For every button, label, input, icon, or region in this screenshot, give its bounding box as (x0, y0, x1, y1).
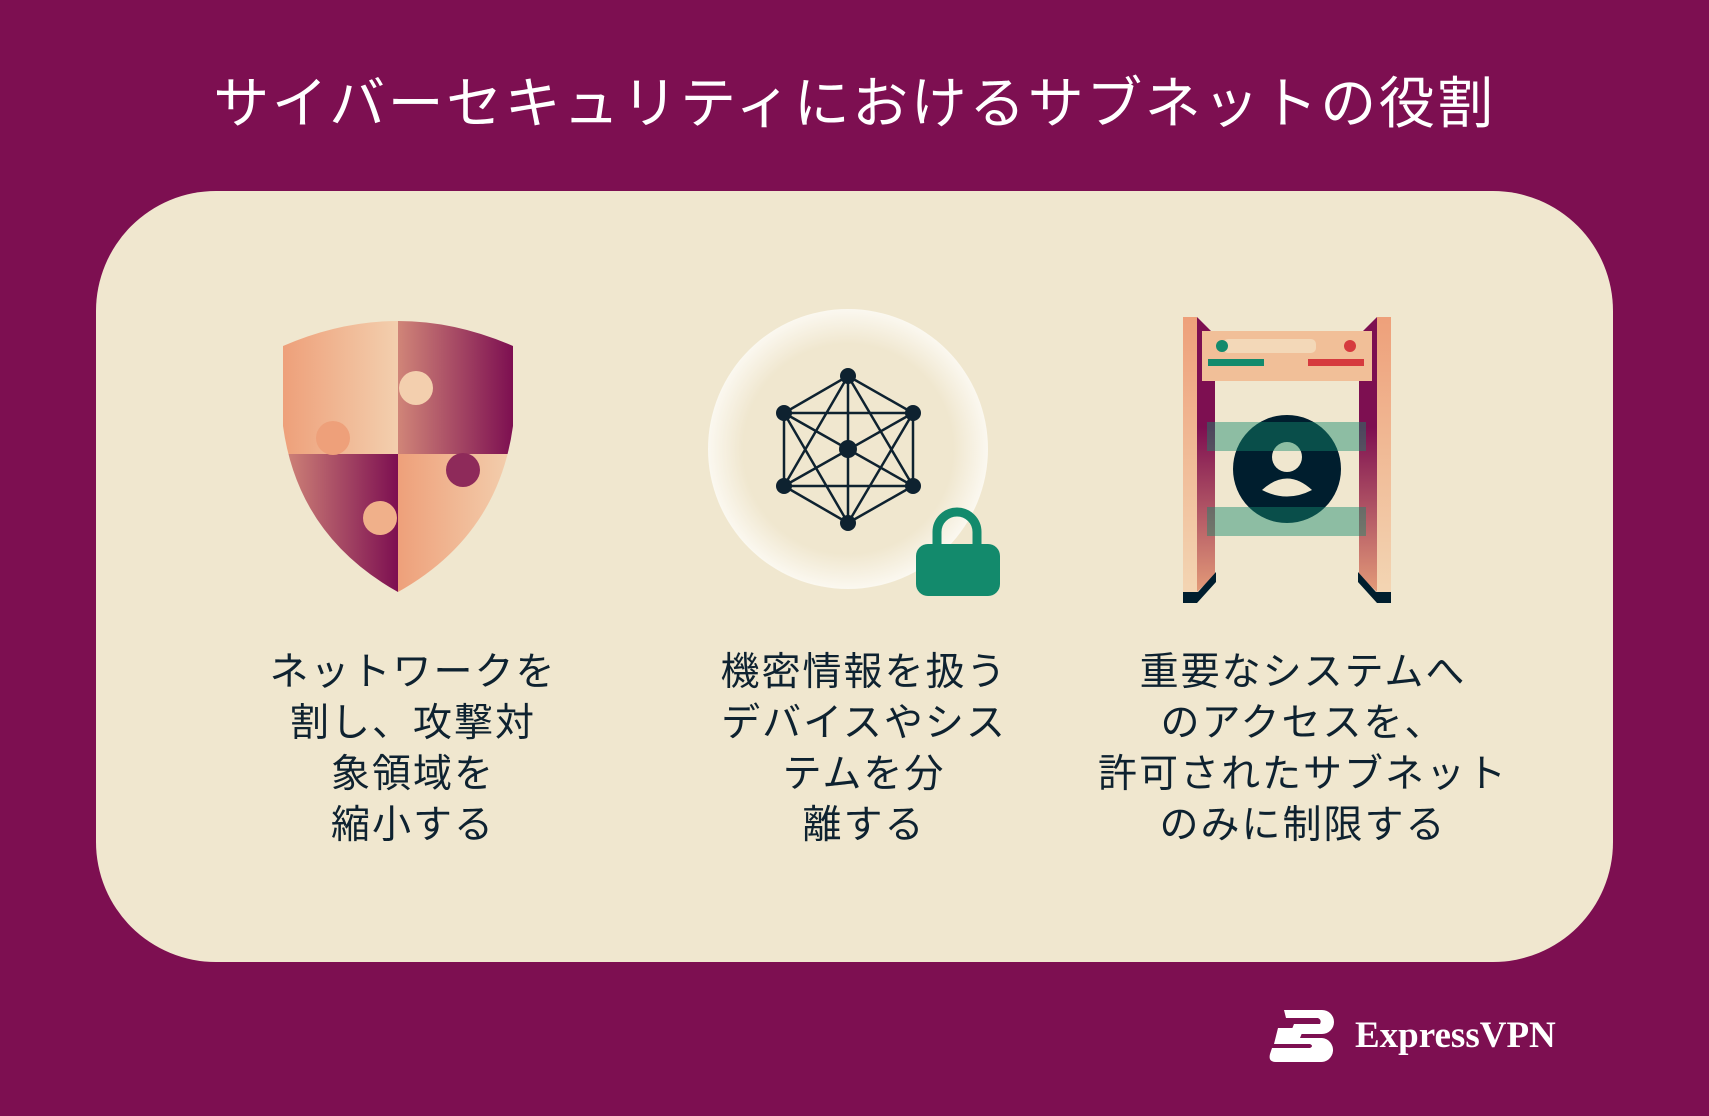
text: column 2 (720, 651, 1008, 847)
icon: security gate scanner (1183, 317, 1391, 603)
icon: puzzle shield (283, 321, 513, 592)
panel: main card (96, 191, 1613, 962)
text: column 1 (269, 651, 556, 847)
logo: ExpressVPN (1270, 1010, 1556, 1062)
text: column 3: 許可されたサブネット (1098, 753, 1508, 796)
text: column 3: のみに制限する (1159, 804, 1446, 847)
text: column 1: 縮小する (331, 804, 495, 847)
logo text: ExpressVPN (1355, 1015, 1556, 1056)
text: column 3: のアクセスを、 (1160, 702, 1446, 745)
icon: network in bubble with lock (708, 309, 1000, 596)
text: column 2: デバイスやシス (721, 702, 1007, 745)
text: column 3 (1098, 651, 1508, 847)
text: column 2: 機密情報を扱う (720, 651, 1008, 694)
text: column 2: テムを分 (783, 753, 945, 796)
title: サイバーセキュリティにおけるサブネットの役割 (213, 72, 1496, 135)
text: column 1: 象領域を (331, 753, 495, 796)
icon: logo mark (1270, 1010, 1334, 1062)
text: column 2: 離する (802, 804, 926, 847)
text: column 1: ネットワークを (269, 651, 556, 694)
text: column 3: 重要なシステムへ (1140, 651, 1466, 694)
text: column 1: 割し、攻撃対 (290, 702, 536, 745)
